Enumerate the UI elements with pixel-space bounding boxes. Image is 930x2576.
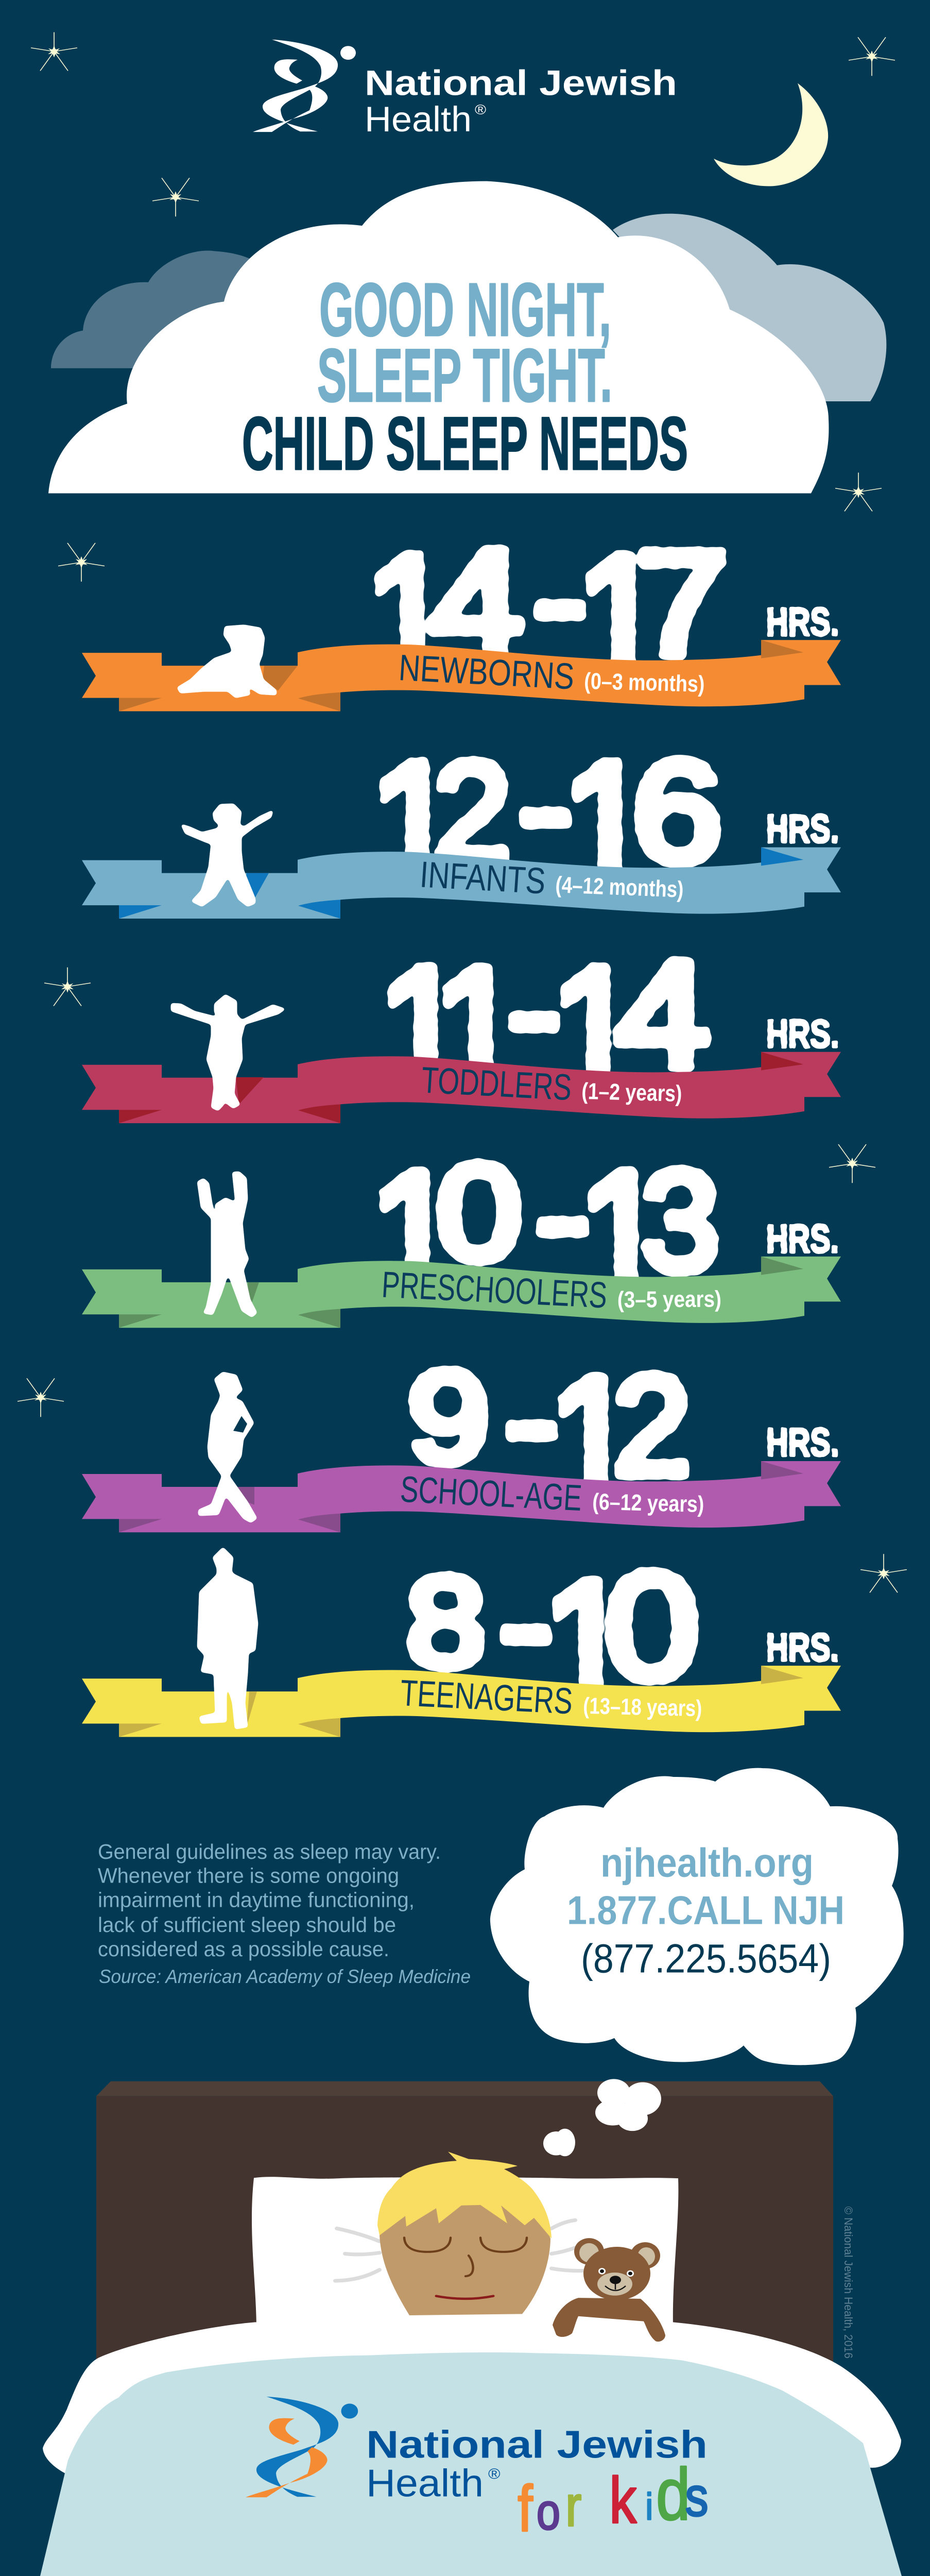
cloud number: 11-14: - xyxy=(507,928,562,1093)
icon: star right of cloud xyxy=(835,472,882,511)
cloud number: 11-14: 4 xyxy=(615,929,710,1099)
silhouette: toddler arms out xyxy=(172,995,284,1110)
pillow xyxy=(252,2177,678,2326)
ribbon: school-age purple xyxy=(82,1461,841,1532)
cloud number: 8-10: - xyxy=(498,1541,553,1705)
cloud number: 14-17: - xyxy=(532,516,587,681)
contact text: (877.225.5654) xyxy=(581,1936,831,1981)
ribbon label: toddlers: (1–2 years) xyxy=(581,1078,682,1107)
logo: National Jewish Health for Kids colour: s xyxy=(685,2466,708,2528)
icon: star top left xyxy=(31,32,77,71)
logo: National Jewish Health white xyxy=(253,40,677,139)
cloud number: 14-17 xyxy=(364,516,728,721)
logo: National Jewish Health white: National Jewish xyxy=(365,64,677,103)
silhouette: newborn crawling xyxy=(178,626,275,697)
cloud number: 8-10 xyxy=(406,1541,699,1747)
silhouette: school-age child hand on hip xyxy=(199,1373,256,1522)
icon: star left of toddlers xyxy=(44,968,91,1006)
bed sheet xyxy=(43,2322,901,2473)
cloud number: 12-16: 6 xyxy=(632,732,722,893)
text block: guidelines note: Whenever there is some ongoing xyxy=(98,1865,399,1888)
logo: National Jewish Health for Kids colour: r xyxy=(565,2474,581,2538)
cloud number: 14-17: 1 xyxy=(364,516,455,721)
HRS labels xyxy=(766,600,839,1670)
logo: National Jewish Health for Kids colour: ® xyxy=(488,2466,501,2482)
cloud: contact xyxy=(490,1768,904,2065)
cloud number: 12-16: 1 xyxy=(369,723,460,928)
logo: National Jewish Health for Kids colour: i xyxy=(646,2486,653,2528)
logo: National Jewish Health for Kids colour: National Jewish xyxy=(366,2423,708,2466)
ribbon label: infants: INFANTS xyxy=(419,854,547,902)
blanket xyxy=(40,2352,902,2576)
ribbon label: toddlers: TODDLERS xyxy=(420,1059,573,1108)
ribbon label: school-age: SCHOOL-AGE xyxy=(399,1469,583,1519)
cloud number: 11-14: 1 xyxy=(377,928,469,1134)
logo: National Jewish Health for Kids colour: Health xyxy=(366,2462,484,2505)
silhouette: preschooler arms up xyxy=(198,1173,256,1316)
copyright note: © National Jewish Health, 2016 xyxy=(842,2207,854,2359)
icon: star right of preschoolers xyxy=(829,1144,875,1183)
cloud number: 9-12: 1 xyxy=(547,1337,639,1543)
cloud number: 12-16: - xyxy=(518,724,573,889)
cloud number: 9-12: - xyxy=(504,1337,559,1501)
logo: National Jewish Health for Kids colour xyxy=(246,2397,708,2545)
thought bubble small xyxy=(543,2129,575,2156)
cloud number: 12-16 xyxy=(369,723,722,928)
bed headboard xyxy=(96,2081,833,2395)
HRS labels: HRS. xyxy=(766,1625,839,1670)
HRS labels: HRS. xyxy=(766,807,839,851)
cloud: dark blue back left xyxy=(51,251,252,368)
ribbon label: school-age: (6–12 years) xyxy=(592,1489,704,1517)
text block: guidelines note: lack of sufficient sleep should be xyxy=(98,1913,396,1937)
ribbon label: preschoolers: PRESCHOOLERS xyxy=(381,1264,608,1316)
logo: National Jewish Health white: ® xyxy=(475,103,486,118)
icon: star near cloud xyxy=(152,178,199,216)
ribbon label: infants: (4–12 months) xyxy=(555,872,684,903)
icon: star top right xyxy=(849,37,895,76)
cloud number: 10-13: 0 xyxy=(436,1136,522,1289)
logo: National Jewish Health white: Health xyxy=(365,100,472,139)
cloud number: 10-13: - xyxy=(536,1133,590,1298)
logo: National Jewish Health for Kids colour: d xyxy=(656,2453,690,2535)
title xyxy=(242,267,688,485)
teddy bear xyxy=(553,2238,665,2342)
title: GOOD NIGHT, xyxy=(319,267,611,352)
silhouette: teenager standing xyxy=(198,1549,257,1728)
HRS labels: HRS. xyxy=(766,600,839,644)
logo: National Jewish Health for Kids colour: o xyxy=(537,2484,560,2540)
logo: National Jewish Health for Kids colour: f xyxy=(518,2472,533,2545)
silhouette: infant arms raised xyxy=(182,805,272,906)
text block: guidelines note: General guidelines as sleep may vary. xyxy=(98,1840,441,1863)
text block: guidelines note: considered as a possible cause. xyxy=(98,1938,389,1961)
cloud number: 11-14: 1 xyxy=(549,928,641,1134)
cloud number: 10-13 xyxy=(369,1132,719,1338)
pillow wrinkles xyxy=(335,2220,584,2281)
ribbon: toddlers red xyxy=(82,1052,841,1123)
cloud: light blue back right xyxy=(613,214,886,401)
cloud number: 11-14 xyxy=(377,928,710,1134)
contact text: 1.877.CALL NJH xyxy=(567,1888,845,1933)
cloud number: 8-10: 8 xyxy=(406,1550,486,1693)
cloud number: 12-16: 2 xyxy=(433,733,511,891)
contact text xyxy=(567,1840,845,1981)
cloud number: 9-12: 9 xyxy=(408,1344,489,1489)
cloud number: 11-14: 1 xyxy=(432,928,524,1134)
cloud number: 10-13: 3 xyxy=(641,1141,719,1301)
ribbon label: teenagers: (13–18 years) xyxy=(583,1693,702,1722)
thought bubble large xyxy=(595,2079,661,2131)
icon: star left of school-age xyxy=(18,1378,64,1417)
HRS labels: HRS. xyxy=(766,1217,839,1261)
ribbon: infants blue xyxy=(82,848,841,919)
text block: guidelines note xyxy=(98,1840,471,1987)
text block: guidelines note: impairment in daytime functioning, xyxy=(98,1889,415,1912)
cloud number: 8-10: 0 xyxy=(605,1542,699,1711)
cloud number: 14-17: 1 xyxy=(575,516,666,721)
text block: guidelines note: Source: American Academy of Sleep Medicine xyxy=(99,1966,471,1987)
contact text: njhealth.org xyxy=(600,1840,814,1886)
cloud number: 9-12 xyxy=(408,1337,691,1543)
ribbon label: newborns: (0–3 months) xyxy=(584,668,705,697)
ribbon: preschoolers green xyxy=(82,1257,841,1328)
cloud: white title cloud xyxy=(48,181,829,494)
cloud number: 14-17: 4 xyxy=(429,517,524,687)
icon: crescent moon xyxy=(714,83,828,186)
logo: National Jewish Health for Kids colour: k xyxy=(609,2464,637,2537)
ribbon label: infants xyxy=(419,854,684,903)
ribbon: newborns orange xyxy=(82,640,841,711)
ribbon label: newborns: NEWBORNS xyxy=(398,647,576,698)
ribbon label: preschoolers: (3–5 years) xyxy=(617,1286,721,1313)
cloud number: 12-16: 1 xyxy=(561,723,653,928)
ribbon label: teenagers: TEENAGERS xyxy=(399,1672,574,1722)
title: SLEEP TIGHT. xyxy=(317,333,612,417)
cloud number: 9-12: 2 xyxy=(613,1346,691,1505)
ribbon: teenagers yellow xyxy=(82,1666,841,1737)
HRS labels: HRS. xyxy=(766,1420,839,1465)
HRS labels: HRS. xyxy=(766,1012,839,1056)
cloud number: 14-17: 7 xyxy=(635,520,728,687)
icon: star left of newborns xyxy=(58,543,105,582)
icon: star right of teenagers xyxy=(860,1554,907,1592)
child head xyxy=(377,2151,552,2315)
cloud number: 10-13: 1 xyxy=(369,1132,460,1338)
cloud number: 8-10: 1 xyxy=(542,1541,633,1747)
cloud number: 10-13: 1 xyxy=(577,1132,669,1338)
